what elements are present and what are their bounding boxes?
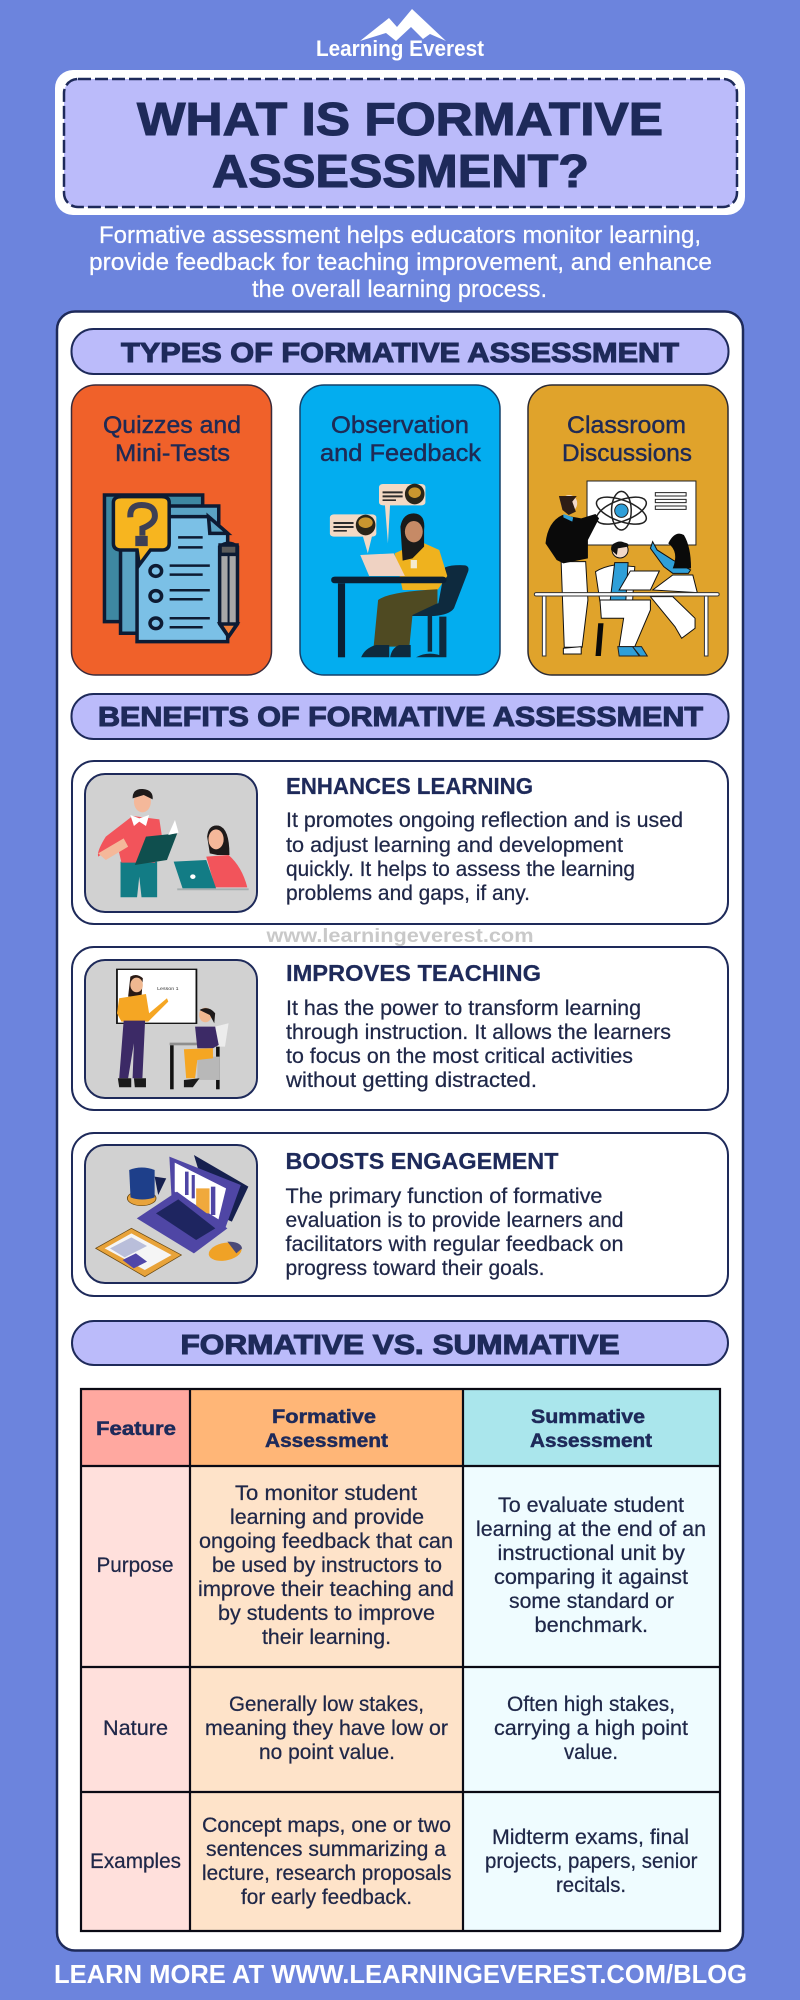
title box: ASSESSMENT?: [212, 145, 589, 197]
benefit: improves teaching: IMPROVES TEACHING: [286, 960, 541, 986]
row: nature: carrying a high point: [494, 1717, 688, 1740]
title box: [55, 70, 745, 215]
benefit: boosts engagement: The primary function of formative: [286, 1184, 602, 1208]
row: examples: Midterm exams, final: [492, 1826, 689, 1849]
logo: Learning Everest: Learning Everest: [316, 36, 485, 61]
row: purpose: some standard or: [509, 1590, 674, 1613]
table header: Assessment: [530, 1431, 653, 1452]
row: purpose: by students to improve: [218, 1602, 435, 1625]
benefit: enhances learning: It promotes ongoing reflection and is used: [286, 808, 683, 832]
row: purpose: ongoing feedback that can: [199, 1530, 453, 1553]
card: observation and feedback: and Feedback: [320, 440, 482, 467]
intro text: [89, 222, 712, 303]
benefit: improves teaching: [72, 947, 728, 1110]
row: examples: [90, 1814, 698, 1909]
benefit: boosts engagement: BOOSTS ENGAGEMENT: [286, 1148, 558, 1174]
row: examples: projects, papers, senior: [485, 1850, 698, 1873]
icon: classroom scene: [534, 481, 719, 656]
illustration: teacher at board and seated student: Lesson 1: [157, 987, 179, 992]
table header: Assessment: [265, 1431, 389, 1452]
heading: formative vs. summative: [72, 1321, 728, 1365]
row: examples: recitals.: [556, 1874, 626, 1897]
logo: Learning Everest: [316, 9, 485, 61]
comparison table: [81, 1389, 720, 1931]
benefit: improves teaching: It has the power to transform learning: [286, 996, 641, 1020]
main white panel: [57, 312, 743, 1950]
illustration: laptop, cup, tablet and mouse: [96, 1155, 248, 1277]
card: classroom discussions: [528, 385, 728, 675]
icon: quiz papers: [104, 495, 237, 642]
row: nature: [103, 1693, 688, 1764]
row: purpose: their learning.: [262, 1626, 391, 1649]
card: quizzes and mini-tests: [72, 385, 272, 675]
row: examples: Examples: [90, 1850, 181, 1873]
benefit: enhances learning: [72, 761, 728, 924]
row: nature: Generally low stakes,: [229, 1693, 424, 1716]
title box: WHAT IS FORMATIVE: [137, 93, 663, 145]
row: examples: sentences summarizing a: [206, 1838, 446, 1861]
benefit: enhances learning: ENHANCES LEARNING: [286, 773, 533, 799]
intro text: the overall learning process.: [252, 276, 547, 303]
row: purpose: learning at the end of an: [476, 1518, 706, 1541]
row: purpose: benchmark.: [534, 1614, 648, 1637]
benefit: improves teaching: to focus on the most critical activities: [286, 1044, 633, 1068]
benefit: enhances learning: quickly. It helps to assess the learning: [286, 857, 635, 881]
heading: types of formative assessment: [72, 329, 728, 374]
row: examples: for early feedback.: [241, 1886, 412, 1909]
intro text: Formative assessment helps educators monitor learning,: [99, 222, 701, 249]
row: purpose: Purpose: [96, 1554, 174, 1577]
table header: Formative: [272, 1407, 376, 1428]
row: purpose: improve their teaching and: [198, 1578, 454, 1601]
row: purpose: To monitor student: [235, 1482, 417, 1505]
benefit: boosts engagement: facilitators with regular feedback on: [286, 1232, 624, 1256]
row: purpose: instructional unit by: [498, 1542, 686, 1565]
row: nature: no point value.: [259, 1741, 395, 1764]
benefit: boosts engagement: progress toward their goals.: [286, 1256, 544, 1280]
watermark: www.learningeverest.com: [265, 926, 534, 947]
heading: types of formative assessment: TYPES OF FORMATIVE ASSESSMENT: [121, 337, 679, 368]
row: purpose: learning and provide: [230, 1506, 424, 1529]
benefit: boosts engagement: [72, 1133, 728, 1296]
row: nature: value.: [564, 1741, 618, 1764]
illustration: teacher with book and student: [98, 789, 249, 897]
illustration: teacher at board and seated student: [117, 969, 229, 1089]
card: observation and feedback: [300, 385, 500, 675]
heading: formative vs. summative: FORMATIVE VS. SUMMATIVE: [180, 1329, 620, 1360]
table header: Summative: [531, 1407, 645, 1428]
intro text: provide feedback for teaching improvement, and enhance: [89, 249, 712, 276]
benefit: enhances learning: problems and gaps, if any.: [286, 881, 530, 905]
row: purpose: To evaluate student: [498, 1494, 684, 1517]
row: purpose: comparing it against: [494, 1566, 688, 1589]
heading: benefits of formative assessment: [72, 694, 728, 739]
benefit: boosts engagement: evaluation is to provide learners and: [286, 1208, 624, 1232]
row: examples: Concept maps, one or two: [202, 1814, 451, 1837]
table header: Feature: [96, 1419, 176, 1440]
table header: [96, 1407, 653, 1452]
card: classroom discussions: Discussions: [562, 440, 692, 467]
benefit: improves teaching: without getting distracted.: [285, 1068, 537, 1092]
row: purpose: [96, 1482, 706, 1649]
row: nature: Nature: [103, 1717, 168, 1740]
card: quizzes and mini-tests: Quizzes and: [103, 412, 241, 439]
benefit: enhances learning: to adjust learning and development: [286, 833, 623, 857]
row: purpose: be used by instructors to: [212, 1554, 442, 1577]
row: examples: lecture, research proposals: [202, 1862, 452, 1885]
card: classroom discussions: Classroom: [567, 412, 686, 439]
row: nature: Often high stakes,: [507, 1693, 675, 1716]
row: nature: meaning they have low or: [205, 1717, 448, 1740]
card: quizzes and mini-tests: Mini-Tests: [115, 440, 230, 467]
footer call to action: LEARN MORE AT WWW.LEARNINGEVEREST.COM/BLOG: [54, 1959, 747, 1989]
benefit: improves teaching: through instruction. It allows the learners: [286, 1020, 671, 1044]
icon: person at laptop with feedback bubbles: [330, 484, 469, 657]
heading: benefits of formative assessment: BENEFITS OF FORMATIVE ASSESSMENT: [98, 701, 703, 732]
card: observation and feedback: Observation: [331, 412, 469, 439]
